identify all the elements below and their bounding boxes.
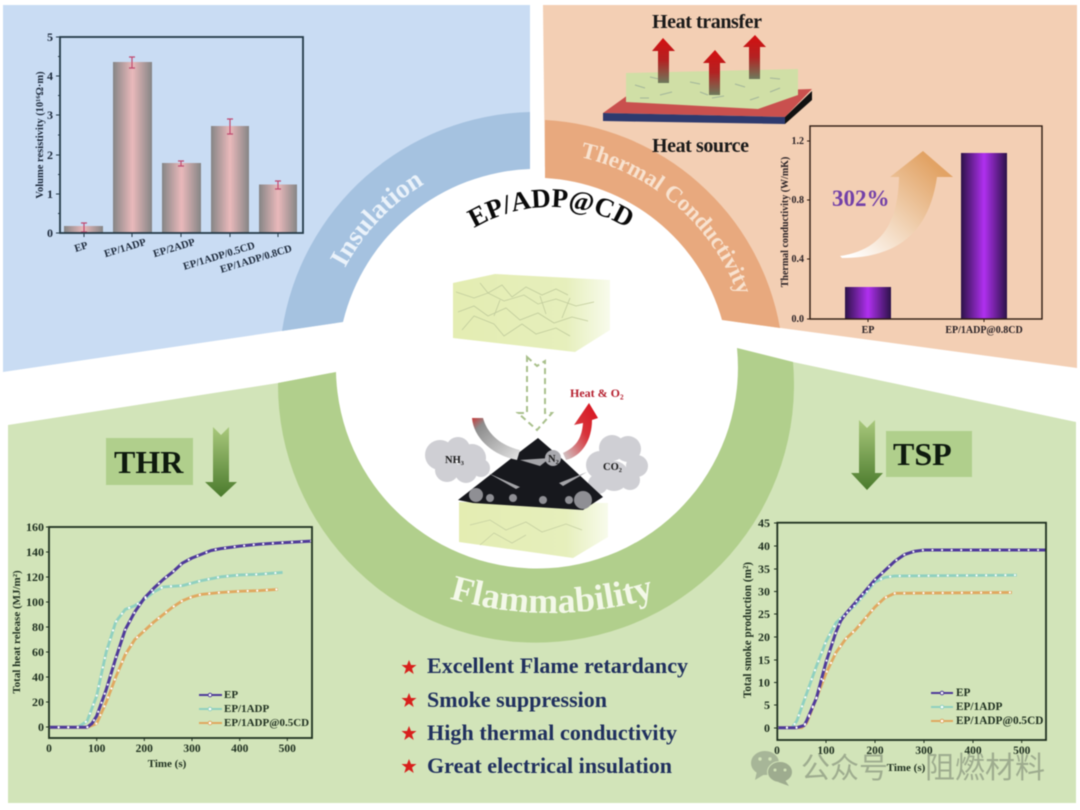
legend: THR bbox=[199, 689, 309, 729]
line chart: total smoke production bbox=[742, 516, 1046, 774]
line chart: total smoke production: Total smoke production (m²) bbox=[742, 562, 754, 698]
bar chart: volume resistivity: EP/1ADP/0.8CD bbox=[219, 243, 294, 276]
line chart: total smoke production: 100 bbox=[817, 745, 835, 757]
illustration: char layer over epoxy with gases bbox=[425, 386, 648, 558]
line chart: total smoke production: Time (s) bbox=[887, 762, 926, 774]
legend: TSP bbox=[931, 687, 1043, 727]
label: Heat & O2: Heat & O₂ bbox=[570, 386, 624, 400]
label box: THR bbox=[106, 438, 193, 485]
series: EP/1ADP bbox=[49, 572, 283, 727]
bar chart: volume resistivity: 4 bbox=[47, 69, 53, 83]
band: thermal conductivity bbox=[544, 120, 780, 328]
line chart: total heat release: 140 bbox=[26, 545, 44, 559]
arrow: incoming grey heat bbox=[472, 418, 520, 460]
legend: THR: EP/1ADP@0.5CD bbox=[224, 717, 309, 729]
central white circle bbox=[331, 167, 741, 577]
line chart: total smoke production: 40 bbox=[758, 539, 770, 553]
legend: TSP: EP bbox=[956, 687, 971, 699]
bar chart: thermal conductivity: 1.2 bbox=[792, 136, 804, 147]
illustration: epoxy network cube bbox=[453, 274, 610, 352]
line chart: total heat release: 120 bbox=[26, 570, 44, 584]
line chart: total heat release: 300 bbox=[183, 743, 201, 755]
bar chart: volume resistivity: 2 bbox=[47, 148, 53, 162]
line chart: total smoke production: 300 bbox=[915, 745, 933, 757]
line chart: total heat release bbox=[11, 520, 312, 770]
line chart: total smoke production: 400 bbox=[964, 745, 982, 757]
label: N2: N₂ bbox=[548, 454, 559, 465]
line chart: total smoke production: 0 bbox=[764, 721, 770, 735]
watermark bbox=[751, 751, 1045, 786]
icon: heat arrow right bbox=[743, 35, 766, 79]
line chart: total heat release: 100 bbox=[26, 595, 44, 609]
bar chart: thermal conductivity: 0.4 bbox=[792, 254, 804, 265]
bar chart: volume resistivity: 0 bbox=[47, 226, 53, 240]
line chart: total smoke production: 25 bbox=[758, 607, 770, 621]
line chart: total smoke production: 500 bbox=[1013, 745, 1031, 757]
label: Insulation: Insulation bbox=[330, 174, 424, 268]
line chart: total smoke production: 5 bbox=[764, 698, 770, 712]
bar chart: thermal conductivity: Thermal conductivity (W/mK) bbox=[780, 157, 791, 287]
line chart: total smoke production: 45 bbox=[758, 516, 770, 530]
bar chart: volume resistivity bbox=[35, 30, 303, 276]
panel: thermal conductivity background bbox=[543, 5, 1077, 368]
line chart: total smoke production: 0 bbox=[774, 745, 780, 757]
cloud: CO2 bbox=[586, 435, 648, 494]
icon: heat arrow middle bbox=[703, 50, 726, 95]
bar chart: volume resistivity: EP bbox=[73, 240, 90, 255]
line chart: total smoke production: 20 bbox=[758, 630, 770, 644]
panel: insulation background bbox=[3, 5, 530, 372]
label: CO2: CO₂ bbox=[603, 462, 622, 473]
label: Heat transfer: Heat transfer bbox=[652, 11, 762, 33]
callout: 302%: 302% bbox=[832, 186, 890, 211]
bar chart: volume resistivity: 3 bbox=[47, 108, 53, 122]
series: EP bbox=[777, 550, 1046, 728]
label box: TSP: TSP bbox=[893, 436, 952, 472]
panel: flammability background bbox=[8, 348, 1076, 803]
series: EP/1ADP bbox=[777, 575, 1017, 728]
icon: TSP down arrow bbox=[851, 420, 883, 490]
line chart: total heat release: 40 bbox=[32, 670, 44, 684]
series: EP/1ADP@0.5CD bbox=[49, 589, 278, 727]
legend: THR: EP/1ADP bbox=[224, 703, 270, 715]
line chart: total heat release: 400 bbox=[231, 743, 249, 755]
line chart: total smoke production: 30 bbox=[758, 584, 770, 598]
legend: TSP: EP/1ADP bbox=[956, 701, 1003, 713]
label box: TSP bbox=[886, 431, 972, 477]
line chart: total heat release: 500 bbox=[279, 743, 296, 755]
bar chart: volume resistivity: EP/2ADP bbox=[152, 237, 197, 260]
text: account name: 公众号 bbox=[801, 753, 888, 785]
line chart: total heat release: 80 bbox=[32, 620, 44, 634]
label: Heat source: Heat source bbox=[652, 135, 749, 157]
bar chart: volume resistivity: EP/1ADP/0.5CD bbox=[182, 240, 257, 273]
bar chart: volume resistivity: 1 bbox=[47, 187, 53, 201]
bar chart: thermal conductivity: 0.0 bbox=[792, 314, 804, 325]
line chart: total heat release: Total heat release (MJ/m²) bbox=[11, 570, 23, 694]
list: key properties bbox=[402, 653, 688, 778]
line chart: total smoke production: 200 bbox=[866, 745, 884, 757]
series: EP/1ADP@0.5CD bbox=[777, 592, 1012, 728]
line chart: total heat release: 160 bbox=[26, 520, 44, 534]
diagram: heat transfer through composite on heat source bbox=[603, 11, 812, 157]
bar chart: thermal conductivity: 0.8 bbox=[792, 195, 804, 206]
icon: THR down arrow bbox=[205, 427, 237, 497]
list: key properties: Smoke suppression bbox=[427, 687, 607, 712]
bar chart: volume resistivity: EP/1ADP bbox=[103, 237, 148, 260]
label box: THR: THR bbox=[114, 444, 184, 480]
label: NH3: NH₃ bbox=[445, 455, 464, 466]
band: insulation bbox=[282, 112, 530, 332]
icon: chat bubbles bbox=[751, 751, 792, 786]
text: brand name: 阻燃材料 bbox=[925, 752, 1045, 785]
line chart: total heat release: 60 bbox=[32, 645, 44, 659]
list: key properties: High thermal conductivity bbox=[427, 720, 677, 745]
list: key properties: Great electrical insulation bbox=[427, 753, 672, 778]
line chart: total heat release: 200 bbox=[136, 743, 153, 755]
label: Thermal Conductivity: Thermal Conductivity bbox=[582, 142, 748, 292]
line chart: total heat release: 0 bbox=[46, 743, 52, 755]
legend: THR: EP bbox=[224, 689, 238, 701]
line chart: total smoke production: 35 bbox=[758, 562, 770, 576]
line chart: total heat release: 100 bbox=[88, 743, 106, 755]
line chart: total heat release: 20 bbox=[32, 695, 44, 709]
bar chart: volume resistivity: 5 bbox=[47, 30, 53, 44]
bar chart: volume resistivity: Volume resistivity (10¹⁶Ω·m) bbox=[35, 71, 46, 199]
line chart: total smoke production: 15 bbox=[758, 653, 770, 667]
icon: growth arrow bbox=[840, 151, 953, 258]
legend: TSP: EP/1ADP@0.5CD bbox=[956, 715, 1043, 727]
line chart: total smoke production: 10 bbox=[758, 676, 770, 690]
list: key properties: Excellent Flame retardancy bbox=[427, 653, 688, 678]
cloud: NH3 bbox=[425, 437, 490, 483]
band: flammability bbox=[278, 348, 794, 643]
icon: heat arrow left bbox=[652, 38, 675, 83]
series: EP bbox=[49, 541, 311, 727]
bar chart: thermal conductivity: EP/1ADP@0.8CD bbox=[945, 325, 1023, 336]
arrow: dashed two-way degradation arrow bbox=[518, 357, 552, 430]
bar chart: thermal conductivity: EP bbox=[862, 325, 874, 336]
line chart: total heat release: 0 bbox=[38, 720, 44, 734]
bar chart: thermal conductivity bbox=[780, 126, 1042, 336]
title: EP/ADP@CD: EP/ADP@CD bbox=[466, 188, 634, 228]
line chart: total heat release: Time (s) bbox=[148, 758, 187, 770]
label: Flammability: Flammability bbox=[450, 576, 651, 614]
arrow: outgoing red bbox=[563, 403, 598, 460]
